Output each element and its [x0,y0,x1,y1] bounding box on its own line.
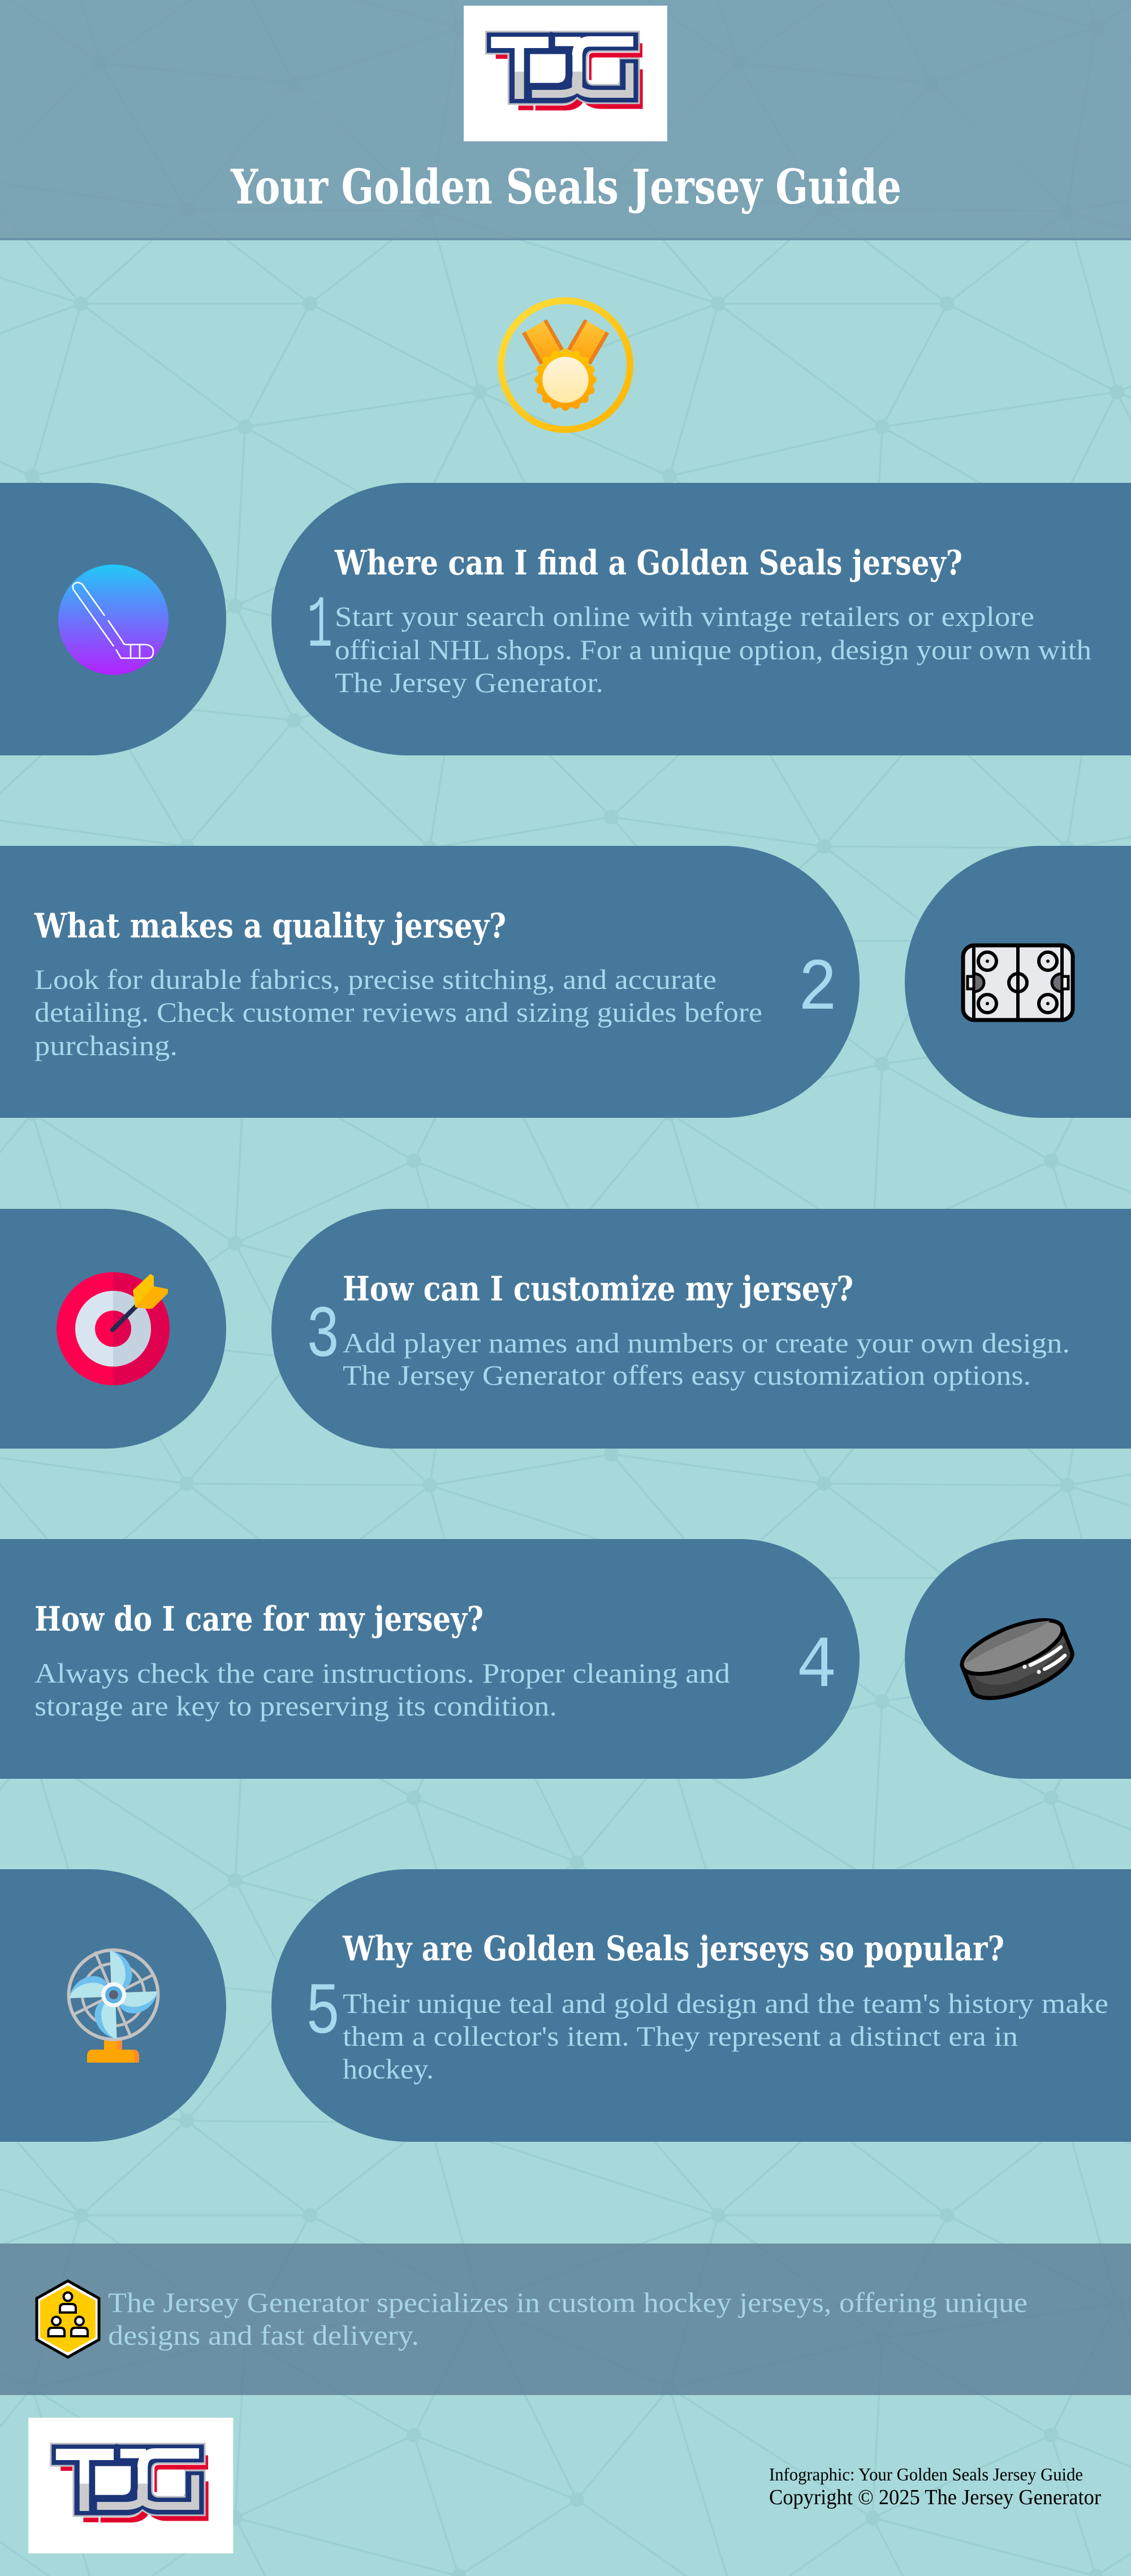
callout text: The Jersey Generator specializes in custom hockey jerseys, offering unique [108,2287,1028,2318]
body 5: hockey. [343,2053,434,2085]
body 4: storage are key to preserving its condition. [34,1690,557,1722]
body 5: them a collector's item. They represent a distinct era in [343,2020,1018,2052]
icon pill 5 [0,1869,226,2142]
icon pill 4 [905,1539,1131,1779]
callout band [0,2244,1131,2395]
heading 1: Where can I find a Golden Seals jersey? [334,543,962,583]
icon: hockey rink [963,945,1073,1020]
footer credits [769,2464,1101,2509]
icon pill 3 [0,1209,226,1449]
heading 5: Why are Golden Seals jerseys so popular? [342,1929,1004,1969]
footer credits: Infographic: Your Golden Seals Jersey Guide [769,2464,1083,2484]
title: Your Golden Seals Jersey Guide [230,159,901,215]
text pill 2 [0,846,860,1118]
text pill 4 [0,1539,860,1779]
body 3 [343,1327,1070,1391]
heading 3: How can I customize my jersey? [343,1269,853,1309]
number 2: 2 [798,948,838,1031]
footer credits: Copyright © 2025 The Jersey Generator [769,2486,1101,2509]
body 2: Look for durable fabrics, precise stitching, and accurate [34,963,716,995]
panel: question 1 [0,483,1131,755]
body 3: Add player names and numbers or create your own design. [343,1327,1070,1359]
icon: target with dart [57,1272,170,1385]
body 5: Their unique teal and gold design and the team's history make [343,1987,1108,2019]
icon: medal [501,301,630,430]
footer logo [28,2418,233,2553]
icon pill 1 [0,483,226,755]
icon: team hexagon [37,2281,99,2357]
panel: question 4 [0,1539,1131,1779]
panel: question 5 [0,1869,1131,2142]
body 2: detailing. Check customer reviews and sizing guides before [34,996,762,1028]
icon: desk fan [69,1950,158,2063]
body 2: purchasing. [34,1030,178,1061]
body 4: Always check the care instructions. Proper cleaning and [34,1657,730,1689]
icon: hockey stick [58,564,169,675]
number 5: 5 [305,1972,340,2055]
icon pill 2 [905,846,1131,1118]
text pill 1 [271,483,1131,755]
icon: hockey puck [955,1609,1079,1709]
body 1: Start your search online with vintage retailers or explore [335,600,1034,632]
number 3: 3 [306,1295,340,1378]
heading 2: What makes a quality jersey? [34,906,506,946]
panel: question 3 [0,1209,1131,1449]
body 1 [335,600,1091,698]
body 1: The Jersey Generator. [335,667,603,698]
body 3: The Jersey Generator offers easy customization options. [343,1359,1031,1391]
callout text: designs and fast delivery. [108,2319,419,2351]
heading 4: How do I care for my jersey? [34,1600,484,1639]
header logo [464,6,667,141]
callout text [108,2287,1028,2351]
body 2 [34,963,762,1061]
header band [0,0,1131,240]
text pill 3 [271,1209,1131,1449]
body 5 [343,1987,1108,2085]
text pill 5 [271,1869,1131,2142]
number 4: 4 [796,1626,837,1709]
panel: question 2 [0,846,1131,1118]
number 1: 1 [307,585,333,668]
body 1: official NHL shops. For a unique option, design your own with [335,634,1091,665]
body 4 [34,1657,730,1722]
